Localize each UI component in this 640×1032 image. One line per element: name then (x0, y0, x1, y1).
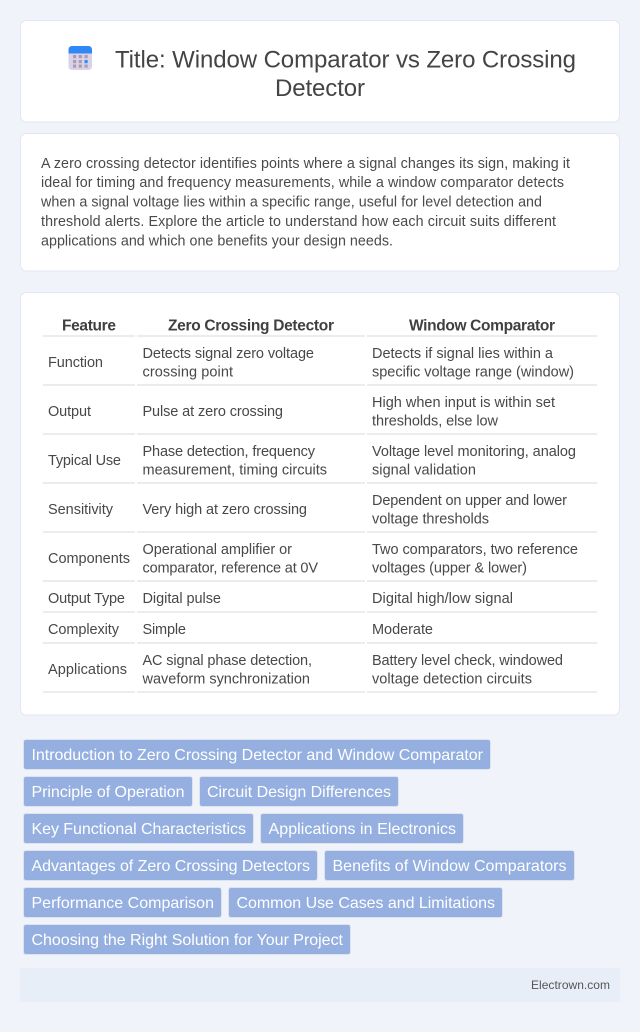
row: output: thresholds, else low (372, 414, 499, 430)
row: applications: Applications (48, 662, 127, 678)
table header: Zero Crossing Detector (168, 318, 334, 334)
row: components: Two comparators, two reference (372, 542, 578, 558)
tag: key characteristics (24, 814, 254, 844)
row: function: crossing point (142, 364, 233, 380)
header panel (20, 20, 620, 122)
row: function (43, 346, 597, 385)
title: Title: Window Comparator vs Zero Crossing (115, 46, 576, 74)
row: output type: Digital high/low signal (372, 591, 513, 607)
tag: advantages (24, 850, 318, 880)
tag: principle: Principle of Operation (32, 784, 184, 801)
tag: introduction: Introduction to Zero Crossing Detector and Window Comparator (32, 747, 484, 764)
row: sensitivity: Dependent on upper and lower (372, 493, 567, 509)
row: typical use (43, 444, 597, 483)
tag: key characteristics: Key Functional Characteristics (32, 821, 246, 838)
tag: applications: Applications in Electronics (268, 821, 456, 838)
footer: Electrown.com (531, 978, 610, 992)
row: typical use: Typical Use (48, 453, 121, 469)
row: applications: waveform synchronization (142, 672, 310, 688)
row: output: Pulse at zero crossing (142, 404, 283, 420)
table header: Feature (62, 318, 116, 334)
intro paragraph: applications and which one benefits your design needs. (41, 234, 393, 250)
tag: performance (24, 888, 222, 918)
row: typical use: Phase detection, frequency (142, 444, 316, 460)
row: sensitivity: Sensitivity (48, 502, 114, 518)
tag: principle (24, 776, 192, 806)
row: typical use: measurement, timing circuits (142, 462, 327, 478)
row: components: voltages (upper & lower) (372, 560, 527, 576)
row: function: Detects signal zero voltage (142, 346, 314, 362)
topic tags (24, 740, 574, 954)
row: output (43, 395, 597, 434)
row: function: specific voltage range (window) (372, 364, 574, 380)
row: components: Operational amplifier or (142, 542, 292, 558)
title: Detector (275, 75, 365, 102)
row: applications (43, 653, 597, 692)
intro paragraph (40, 156, 570, 250)
panel: comparison table (20, 292, 620, 715)
icon: calendar (68, 46, 92, 70)
row: components: Components (48, 551, 130, 567)
row: applications: voltage detection circuits (372, 672, 532, 688)
intro paragraph: threshold alerts. Explore the article to understand how each circuit suits different (41, 214, 556, 230)
tag: applications (260, 814, 464, 844)
row: complexity: Simple (142, 622, 186, 638)
tag: choosing (24, 924, 350, 954)
tag: benefits (324, 850, 574, 880)
row: output: Output (48, 404, 91, 420)
row: complexity (43, 622, 597, 643)
intro paragraph: A zero crossing detector identifies points where a signal changes its sign, making it (41, 156, 570, 172)
tag: choosing: Choosing the Right Solution for Your Project (32, 932, 344, 949)
tag: use cases (228, 888, 502, 918)
row: sensitivity: Very high at zero crossing (142, 502, 307, 518)
row: output type (43, 591, 597, 612)
row: typical use: Voltage level monitoring, analog (372, 444, 576, 460)
title (115, 46, 576, 102)
intro paragraph: ideal for timing and frequency measurements, while a window comparator detects (41, 175, 564, 191)
row: complexity: Moderate (372, 622, 433, 638)
row: components: comparator, reference at 0V (142, 560, 318, 576)
tag: benefits: Benefits of Window Comparators (332, 858, 566, 875)
row: output type: Output Type (48, 591, 125, 607)
table header (43, 318, 597, 336)
row: sensitivity (43, 493, 597, 532)
tag: introduction (24, 740, 490, 770)
tag: advantages: Advantages of Zero Crossing Detectors (32, 858, 310, 875)
tag: use cases: Common Use Cases and Limitations (236, 895, 495, 912)
tag: circuit design: Circuit Design Differences (207, 784, 391, 801)
tag: circuit design (200, 776, 398, 806)
tag: performance: Performance Comparison (32, 895, 214, 912)
row: function: Function (48, 355, 103, 371)
row: typical use: signal validation (372, 462, 476, 478)
row: applications: AC signal phase detection, (142, 653, 312, 669)
row: complexity: Complexity (48, 622, 120, 638)
row: sensitivity: voltage thresholds (372, 512, 489, 528)
row: components (43, 542, 597, 581)
row: output: High when input is within set (372, 395, 555, 411)
row: function: Detects if signal lies within a (372, 346, 554, 362)
row: output type: Digital pulse (142, 591, 221, 607)
table header: Window Comparator (409, 318, 555, 334)
footer (20, 968, 620, 1002)
row: applications: Battery level check, windowed (372, 653, 563, 669)
intro paragraph: when a signal voltage lies within a specific range, useful for level detection and (40, 194, 542, 210)
panel: introduction (20, 134, 620, 271)
